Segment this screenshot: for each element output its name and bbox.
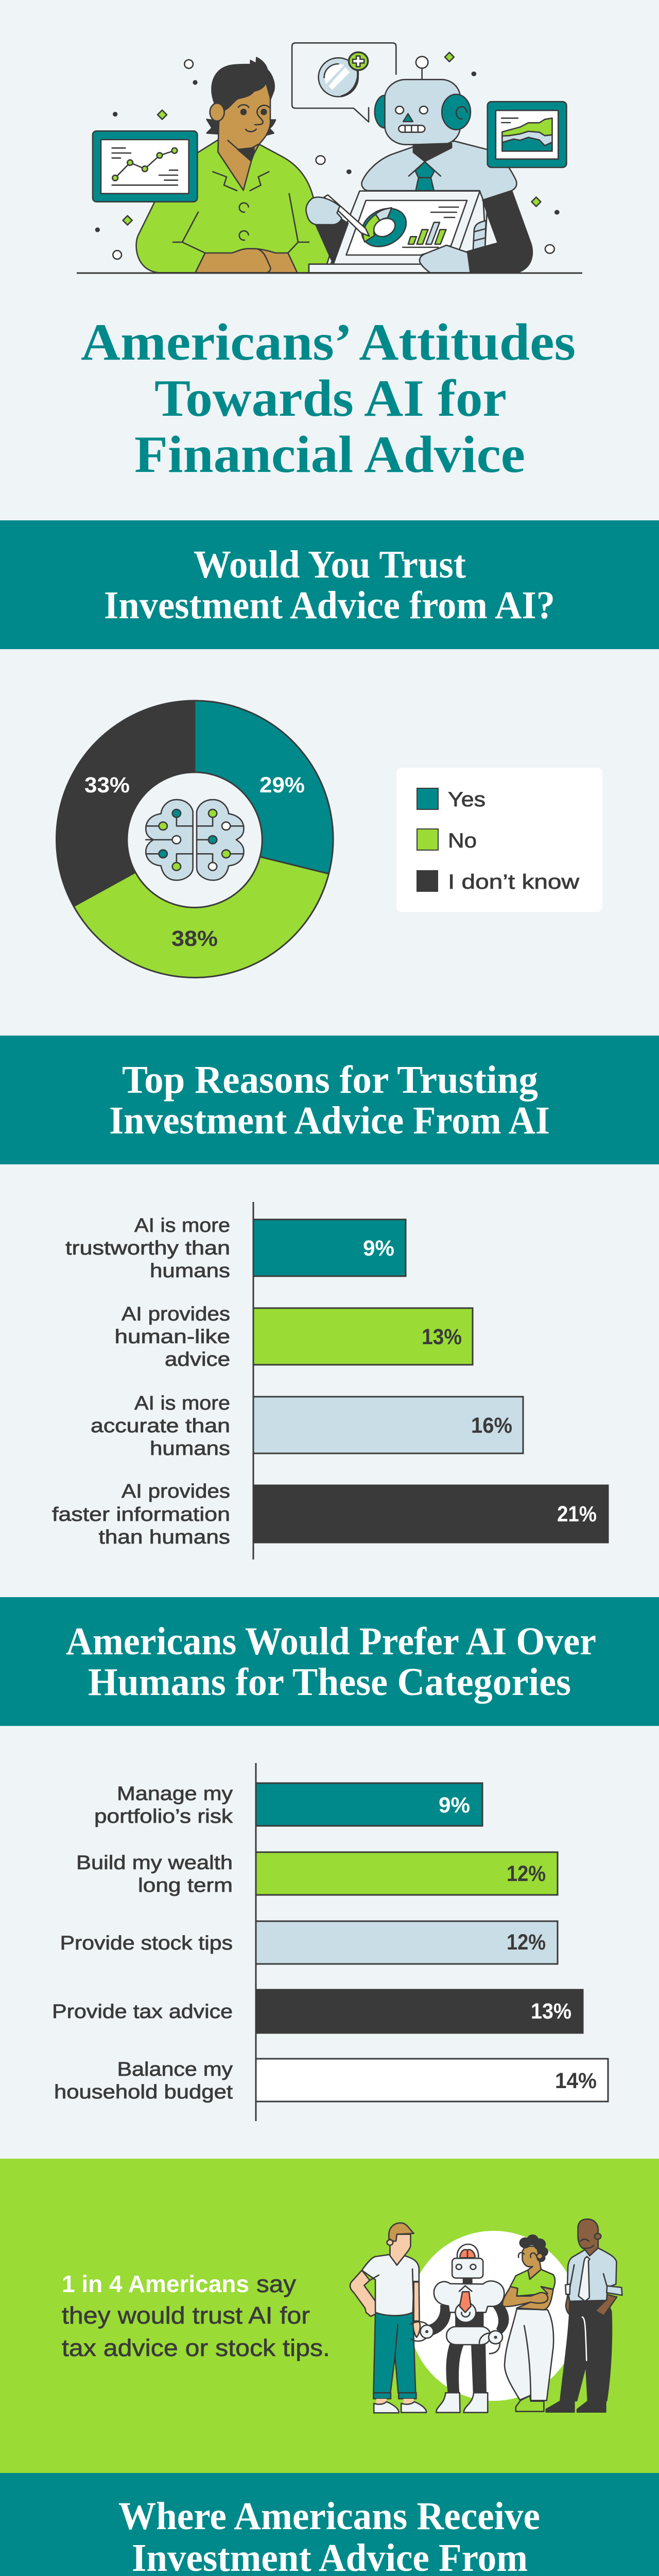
main title: Financial Advice	[134, 426, 525, 484]
panel: callout 1 in 4 Americans	[0, 2159, 659, 2473]
icon: circuit brain	[146, 800, 244, 880]
bar chart: reasons: humans	[150, 1438, 230, 1460]
bar chart: categories: 13%	[531, 1999, 571, 2024]
section heading band: Investment Advice from AI?	[104, 584, 555, 627]
bar chart: reasons: 13%	[422, 1325, 462, 1349]
hero illustration: woman and robot advisor	[77, 43, 582, 273]
bar chart: categories: portfolio’s risk	[94, 1806, 233, 1827]
section heading band	[0, 1036, 659, 1164]
bar chart: categories: Provide tax advice	[52, 2001, 233, 2023]
bar chart: reasons: human-like	[114, 1326, 230, 1348]
donut chart: 33%	[84, 773, 130, 798]
callout text: say	[256, 2270, 296, 2297]
section heading band	[0, 2473, 659, 2576]
legend: Yes	[448, 788, 485, 811]
section heading band	[0, 520, 659, 649]
callout text	[62, 2270, 330, 2361]
section heading band: Humans for These Categories	[88, 1660, 571, 1704]
bar chart: reasons: trustworthy than	[65, 1238, 230, 1259]
section heading band: Where Americans Receive	[118, 2495, 540, 2538]
bar chart: reasons: faster information	[52, 1504, 230, 1526]
bar chart: reasons: 9%	[363, 1236, 394, 1261]
panel: where Americans receive investment advice	[0, 2473, 659, 2576]
bar chart: reasons: accurate than	[91, 1415, 230, 1437]
bar chart: categories: Build my wealth	[76, 1852, 233, 1874]
callout text: 1 in 4 Americans	[62, 2270, 249, 2297]
main title	[81, 313, 576, 484]
bar chart: reasons: AI provides	[122, 1303, 230, 1325]
bar chart: categories: long term	[138, 1875, 233, 1896]
illustration: three people and a robot	[350, 2219, 622, 2413]
section heading band: Americans Would Prefer AI Over	[66, 1620, 596, 1663]
section heading band: Would You Trust	[194, 543, 466, 586]
main title: Towards AI for	[154, 369, 507, 428]
donut chart: 29%	[259, 773, 305, 798]
bar chart: reasons: advice	[165, 1349, 230, 1370]
bar chart: categories: 14%	[555, 2069, 597, 2093]
panel: top reasons for trusting investment advice from AI	[0, 1036, 659, 1560]
bar chart: reasons: AI is more	[134, 1215, 230, 1236]
main title: Americans’ Attitudes	[81, 313, 576, 371]
section heading band: Top Reasons for Trusting	[122, 1058, 538, 1101]
section heading band	[0, 1597, 659, 1726]
bar chart: reasons: 16%	[471, 1413, 512, 1438]
bar chart: categories: household budget	[54, 2081, 233, 2103]
legend: No	[448, 829, 477, 852]
legend	[396, 768, 602, 912]
panel: Americans would prefer AI over humans	[0, 1597, 659, 2121]
bar chart: categories: 12%	[507, 1861, 546, 1886]
bar chart: categories: Balance my	[117, 2059, 233, 2080]
callout text: tax advice or stock tips.	[62, 2334, 330, 2361]
section heading band: Investment Advice From AI	[109, 1099, 550, 1142]
panel: would you trust investment advice from AI	[0, 520, 659, 977]
bar chart: categories: Manage my	[117, 1783, 233, 1805]
donut chart: 38%	[171, 926, 218, 951]
bar chart: reasons	[52, 1202, 608, 1560]
illustration: woman with chart panel	[93, 58, 330, 273]
callout text: they would trust AI for	[62, 2302, 310, 2329]
bar chart: reasons: humans	[150, 1260, 230, 1282]
illustration: robot with tablet and speech bubble	[292, 43, 566, 273]
bar chart: reasons: AI provides	[122, 1481, 230, 1502]
bar chart: categories	[52, 1763, 608, 2121]
legend: I don’t know	[448, 871, 579, 893]
bar chart: reasons: AI is more	[134, 1393, 230, 1414]
bar chart: reasons: than humans	[99, 1527, 230, 1548]
bar chart: reasons: 21%	[557, 1502, 597, 1527]
bar chart: categories: 9%	[439, 1793, 470, 1818]
donut chart	[57, 701, 333, 977]
bar chart: categories: 12%	[507, 1930, 546, 1955]
floor line	[77, 272, 582, 274]
bar chart: categories: Provide stock tips	[60, 1933, 233, 1954]
